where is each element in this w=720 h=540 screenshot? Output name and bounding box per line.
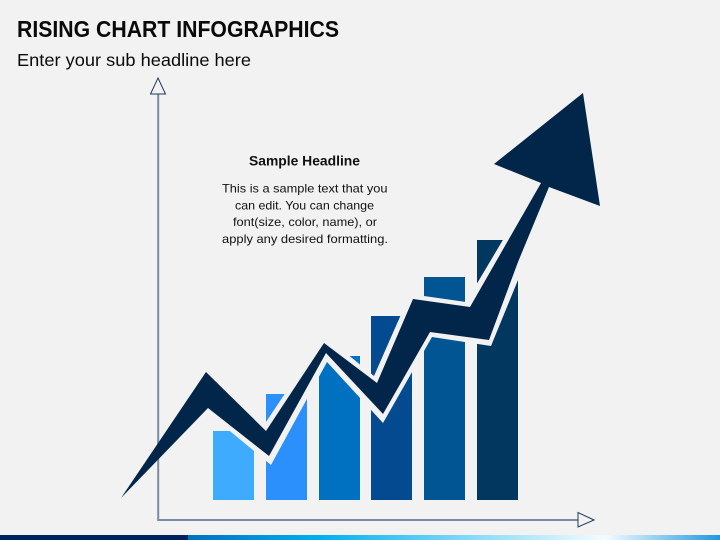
footer navy segment bbox=[0, 535, 188, 540]
rising arrow bbox=[121, 93, 600, 498]
body text bbox=[222, 182, 388, 246]
bar chart bbox=[213, 240, 518, 500]
bar 2 bbox=[266, 394, 307, 500]
body text: This is a sample text that you bbox=[222, 182, 388, 196]
bar 1 bbox=[213, 431, 254, 500]
subtitle: Enter your sub headline here bbox=[17, 50, 251, 70]
x axis arrowhead bbox=[578, 512, 594, 527]
bar 4 bbox=[371, 316, 412, 500]
title: RISING CHART INFOGRAPHICS bbox=[17, 16, 339, 42]
gap band around arrow bbox=[206, 228, 530, 465]
chart axes bbox=[150, 78, 594, 527]
axis lines bbox=[158, 94, 578, 520]
bar 6 bbox=[477, 240, 518, 500]
bar 3 bbox=[319, 356, 360, 500]
body text: can edit. You can change bbox=[235, 198, 374, 212]
y axis arrowhead bbox=[150, 78, 166, 94]
sample headline: Sample Headline bbox=[249, 154, 360, 168]
body text: font(size, color, name), or bbox=[233, 215, 377, 229]
body text: apply any desired formatting. bbox=[222, 232, 388, 246]
text block: sample headline and body bbox=[222, 154, 388, 246]
footer gradient segment bbox=[188, 535, 720, 540]
bar 5 bbox=[424, 277, 465, 500]
footer bar bbox=[0, 535, 720, 540]
